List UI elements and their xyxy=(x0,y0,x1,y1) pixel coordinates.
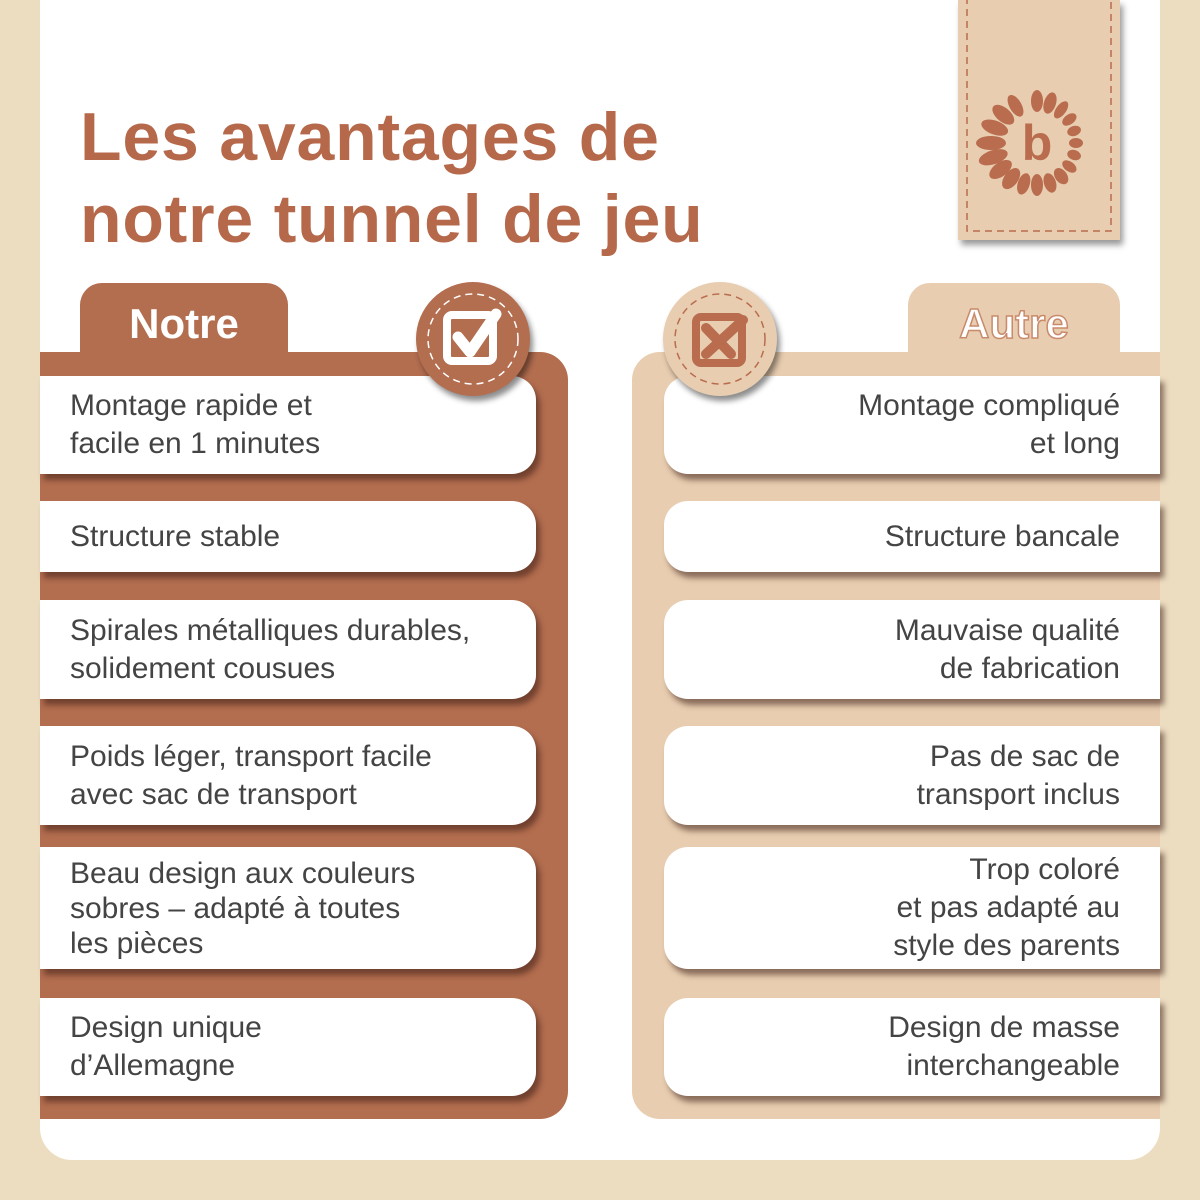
title xyxy=(80,99,703,257)
icon: cross badge xyxy=(663,282,777,396)
text: sobres – adapté à toutes xyxy=(70,892,400,924)
text: transport inclus xyxy=(917,778,1120,810)
text: style des parents xyxy=(893,929,1120,962)
text: et pas adapté au xyxy=(896,891,1120,924)
title: notre tunnel de jeu xyxy=(80,181,703,257)
text: Pas de sac de xyxy=(930,740,1120,772)
text: Beau design aux couleurs xyxy=(70,856,415,890)
text: Mauvaise qualité xyxy=(895,614,1120,646)
text: Poids léger, transport facile xyxy=(70,740,432,772)
right cards: et long xyxy=(1030,427,1120,460)
tab: Autre xyxy=(908,283,1120,363)
text: Trop coloré xyxy=(969,853,1120,886)
left cards: facile en 1 minutes xyxy=(70,427,320,460)
title: Les avantages de xyxy=(80,99,660,175)
text: Structure bancale xyxy=(885,520,1120,552)
text: Spirales métalliques durables, xyxy=(70,614,470,646)
tab: Notre xyxy=(80,283,288,363)
right cards: Montage compliqué xyxy=(858,389,1120,422)
right cards xyxy=(664,376,1160,474)
text: d’Allemagne xyxy=(70,1049,235,1082)
tab: Autre: Autre xyxy=(959,300,1069,347)
text: de fabrication xyxy=(940,652,1120,684)
text: avec sac de transport xyxy=(70,778,357,810)
text: les pièces xyxy=(70,926,203,960)
text: interchangeable xyxy=(906,1049,1120,1082)
panel: Notre xyxy=(40,283,568,1119)
logo tag xyxy=(958,0,1120,240)
text: Design unique xyxy=(70,1011,262,1044)
left cards: Montage rapide et xyxy=(70,389,312,422)
panel: Autre xyxy=(632,283,1160,1119)
text: Structure stable xyxy=(70,520,280,552)
tab: Notre: Notre xyxy=(129,300,239,347)
left cards xyxy=(40,376,536,474)
text: Design de masse xyxy=(888,1011,1120,1044)
text: solidement cousues xyxy=(70,652,335,684)
logo tag: b xyxy=(1022,115,1052,171)
icon: check badge xyxy=(416,282,530,396)
